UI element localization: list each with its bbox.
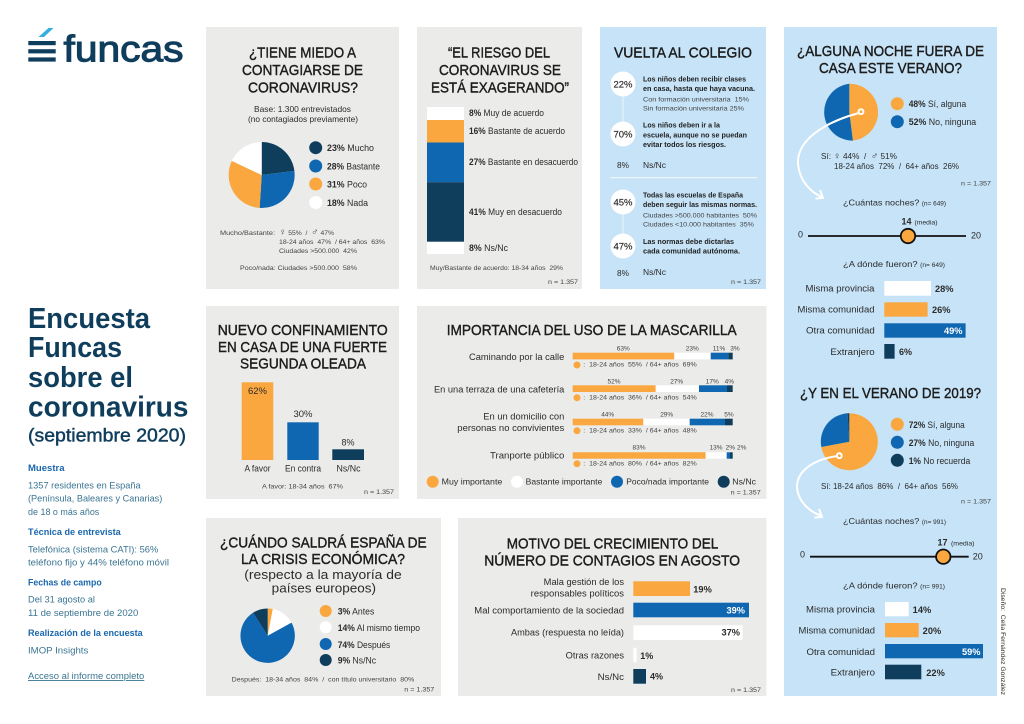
survey details: teléfono fijo y 44% teléfono móvil (28, 558, 169, 568)
percentage circles: 8% (617, 268, 629, 278)
survey details: Técnica de entrevista (28, 527, 122, 537)
heading: ¿TIENE MIEDO A (249, 44, 356, 62)
survey details: Muestra (28, 463, 66, 473)
statement block 2: Ciudades <10.000 habitantes 35% (643, 221, 754, 228)
breakdown: verano 2019: Sí: 18-24 años 86% / 64+ años 56% (821, 482, 958, 491)
heading: CONTAGIARSE DE (242, 62, 363, 79)
bar chart: destino 2019: Otra comunidad (806, 647, 875, 657)
pie chart: este verano (824, 84, 878, 141)
bar chart: Ambas (respuesta no leída) (511, 628, 624, 638)
pie chart (229, 142, 295, 208)
bar chart: destino 2019: 20% (923, 626, 941, 636)
statement block 1: Ns/Nc (643, 160, 667, 170)
main title (28, 303, 188, 446)
heading: MOTIVO DEL CRECIMIENTO DEL (507, 535, 718, 552)
statement block 1: Los niños deben ir a la (643, 121, 721, 130)
breakdown: este verano: 18-24 años 72% / 64+ años 26% (834, 162, 959, 171)
pie chart (240, 608, 295, 663)
sample size: n = 1.357 (731, 491, 761, 497)
breakdown: este verano: n = 1.357 (961, 182, 992, 188)
legend: 23% Mucho (327, 143, 374, 153)
statement block 2: cada comunidad autónoma. (643, 246, 740, 255)
heading: LA CRISIS ECONÓMICA? (241, 551, 405, 568)
heading: (respecto a la mayoría de (244, 567, 402, 582)
row: transporte público: 83% (632, 444, 646, 451)
percentage circles: 45% (614, 198, 633, 208)
row: domicilio: 22% (700, 412, 714, 419)
row: domicilio: personas no convivientes (457, 423, 565, 433)
survey details: Telefónica (sistema CATI): 56% (28, 544, 158, 554)
arrow: este verano (798, 109, 863, 198)
bar chart: responsables políticos (531, 589, 625, 599)
stacked bar (427, 107, 464, 254)
percentage circles: 47% (614, 242, 633, 252)
heading (242, 44, 363, 96)
pie chart: verano 2019 (821, 413, 878, 470)
legend: 31% Poco (327, 180, 367, 190)
sample size: n = 1.357 (404, 688, 435, 694)
percentage circles: 70% (614, 130, 633, 140)
heading: verano 2019: ¿Y EN EL VERANO DE 2019? (800, 385, 981, 402)
bar chart: Ns/Nc (598, 672, 625, 682)
statement block 1 (643, 75, 755, 170)
heading: EN CASA DE UNA FUERTE (218, 339, 387, 356)
breakdown: verano 2019: n = 1.357 (961, 499, 992, 505)
row: transporte público: : 18-24 años 80% / 64+ años 82% (583, 460, 697, 467)
heading: CORONAVIRUS SE (439, 62, 561, 79)
heading (484, 535, 740, 570)
statement block 1: Con formación universitaria 15% (643, 97, 749, 104)
survey details: Fechas de campo (28, 578, 102, 588)
legend: verano 2019: 1% No recuerda (909, 456, 970, 466)
row: terraza: 52% (607, 378, 621, 385)
bar chart: destino 2020: Misma provincia (806, 284, 874, 294)
bar chart: A favor (244, 464, 271, 474)
survey details: de 18 o más años (28, 507, 100, 517)
legend (320, 605, 420, 666)
bar chart: Mal comportamiento de la sociedad (474, 605, 624, 615)
legend: 3% Antes (338, 607, 375, 617)
bar chart: destino 2020: 49% (944, 326, 962, 336)
row: caminando por la calle: 23% (686, 346, 699, 353)
legend (427, 476, 757, 488)
row: caminando por la calle (469, 346, 740, 369)
bar chart: 62% (248, 386, 268, 397)
bar chart: 1% (640, 651, 653, 661)
statement block 1: Sin formación universitaria 25% (643, 105, 744, 112)
bar chart: 37% (722, 628, 740, 638)
bar chart: En contra (285, 464, 321, 474)
percentage circles: 22% (614, 80, 633, 90)
main title: Encuesta (28, 303, 151, 335)
row: terraza: 27% (670, 378, 683, 385)
row: transporte público (490, 444, 747, 467)
legend: 18% Nada (327, 198, 368, 208)
bar chart: Ns/Nc (336, 464, 361, 474)
main title: Funcas (28, 332, 122, 364)
bar chart: destino 2019 (798, 580, 983, 679)
statement block 1: escuela, aunque no se puedan (643, 130, 747, 140)
row: caminando por la calle: : 18-24 años 55% / 64+ años 69% (583, 362, 697, 369)
heading (431, 44, 569, 96)
bar chart (474, 577, 749, 684)
statement block 2: Ciudades >500.000 habitantes 50% (643, 213, 757, 220)
bar chart: destino 2019: 14% (913, 605, 931, 615)
bar chart: Mala gestión de los (544, 577, 625, 587)
bar chart (242, 382, 364, 474)
survey details: 1357 residentes en España (28, 480, 141, 490)
bar chart: Otras razones (566, 650, 625, 660)
slider: noches 2019: 0 (800, 550, 805, 560)
slider: noches 2020: 14 (902, 216, 912, 226)
arrow: verano 2019 (797, 453, 842, 518)
heading: ¿CUÁNDO SALDRÁ ESPAÑA DE (220, 534, 427, 551)
bar chart: destino 2019: Misma provincia (806, 605, 875, 615)
heading: CORONAVIRUS? (248, 80, 358, 96)
breakdown note (220, 227, 385, 272)
bar chart: 19% (693, 585, 712, 595)
breakdown note: Mucho/Bastante: (220, 230, 275, 237)
row: caminando por la calle: Caminando por la calle (469, 352, 564, 362)
row: transporte público: 2% (737, 444, 747, 451)
main title: sobre el (28, 362, 133, 394)
base note (248, 104, 358, 124)
note: Después: 18-34 años 84% / con título universitario 80% (232, 677, 415, 684)
legend: 28% Bastante (327, 162, 380, 172)
percentage circles (610, 72, 636, 278)
panel: salida de la crisis (206, 518, 441, 696)
slider: noches 2019: (media) (951, 542, 974, 548)
bar chart: destino 2020: ¿A dónde fueron? (n= 649) (843, 259, 945, 269)
main title: coronavirus (28, 392, 188, 424)
panel: vuelta al colegio (600, 27, 766, 289)
bar chart: destino 2020: 28% (935, 284, 954, 294)
bar chart: destino 2020: 6% (899, 347, 912, 357)
panel: motivo del crecimiento (458, 518, 766, 696)
panel: el riesgo se está exagerando (417, 27, 582, 289)
row: domicilio: En un domicilio con (483, 411, 564, 421)
survey details: 11 de septiembre de 2020 (28, 608, 138, 618)
bar labels: 8% Ns/Nc (469, 243, 508, 253)
bar labels (469, 108, 578, 253)
bar chart: 39% (726, 605, 745, 615)
legend: verano 2019: 27% No, ninguna (909, 438, 974, 448)
legend: Poco/nada importante (626, 476, 709, 486)
logo: funcas: funcas (64, 29, 184, 70)
heading: países europeos) (272, 580, 376, 595)
legend: este verano (891, 97, 976, 128)
survey details: (Península, Baleares y Canarias) (28, 494, 162, 504)
panel: nuevo confinamiento (206, 306, 399, 499)
statement block 2: Todas las escuelas de España (643, 191, 744, 200)
legend (309, 141, 380, 209)
logo: funcas (28, 28, 183, 70)
row: terraza: 17% (706, 378, 719, 385)
legend: este verano: 52% No, ninguna (909, 117, 976, 127)
sample size: n = 1.357 (731, 688, 762, 694)
heading: NÚMERO DE CONTAGIOS EN AGOSTO (484, 553, 740, 570)
note: A favor: 18-34 años 67% (262, 483, 343, 490)
sample size: n = 1.357 (731, 280, 762, 286)
statement block 2: Ns/Nc (643, 267, 667, 277)
breakdown note: Poco/nada: Ciudades >500.000 58% (240, 265, 357, 272)
bar chart: destino 2020: Misma comunidad (798, 305, 874, 315)
row: terraza: 4% (725, 378, 734, 385)
slider: noches 2020: (media) (914, 220, 938, 226)
bar chart: destino 2020: Extranjero (830, 347, 875, 357)
panel: noches fuera de casa (784, 27, 997, 696)
bar chart: destino 2019: 22% (926, 668, 945, 678)
heading: ESTÁ EXAGERANDO” (431, 80, 569, 96)
slider: noches 2020: 0 (798, 230, 803, 240)
panel: uso de la mascarilla (417, 306, 766, 499)
survey details: IMOP Insights (28, 645, 89, 655)
heading (220, 534, 427, 595)
design credit: Diseño: Celia Fernández González (999, 588, 1006, 696)
row: domicilio: : 18-24 años 33% / 64+ años 48% (583, 428, 697, 435)
legend: 74% Después (338, 640, 391, 650)
base note: (no contagiados previamente) (248, 114, 358, 124)
heading: este verano (797, 43, 984, 77)
heading: NUEVO CONFINAMIENTO (218, 322, 388, 339)
row: caminando por la calle: 3% (730, 346, 740, 353)
statement block 1: evitar todos los riesgos. (643, 140, 726, 149)
heading: este verano: ¿ALGUNA NOCHE FUERA DE (797, 43, 984, 60)
row: transporte público: Tranporte público (490, 450, 564, 460)
survey details: Del 31 agosto al (28, 595, 95, 605)
bar chart: 4% (650, 672, 663, 682)
panel: miedo a contagiarse (206, 27, 399, 289)
row: transporte público: 2% (726, 444, 735, 451)
slider: noches 2020 (798, 198, 981, 243)
bar chart: destino 2020 (798, 259, 966, 359)
breakdown: este verano (821, 151, 992, 188)
bar labels: 41% Muy en desacuerdo (469, 207, 562, 217)
breakdown: este verano: Sí: ♀ 44% / ♂ 51% (821, 151, 897, 162)
bar chart: destino 2020: 26% (932, 305, 950, 315)
slider: noches 2019: 17 (938, 538, 948, 548)
main title: (septiembre 2020) (28, 425, 186, 446)
slider: noches 2019: 20 (973, 552, 983, 562)
statement block 2: Las normas debe dictarlas (643, 237, 734, 246)
base note: Base: 1.300 entrevistados (254, 104, 351, 114)
bar labels: 27% Bastante en desacuerdo (469, 157, 578, 167)
bar chart: destino 2019: ¿A dónde fueron? (n= 991) (843, 580, 945, 590)
bar chart: destino 2019: 59% (962, 647, 980, 657)
heading: IMPORTANCIA DEL USO DE LA MASCARILLA (447, 322, 737, 339)
breakdown note: 18-24 años 47% / 64+ años 63% (279, 239, 385, 246)
legend: Ns/Nc (732, 476, 757, 486)
row: domicilio (457, 411, 734, 435)
bar labels: 16% Bastante de acuerdo (469, 126, 565, 136)
statement block 1: en casa, hasta que haya vacuna. (643, 84, 755, 93)
heading: VUELTA AL COLEGIO (614, 44, 752, 62)
slider: noches 2019: ¿Cuántas noches? (n= 991) (843, 516, 946, 526)
row: caminando por la calle: 11% (713, 346, 725, 353)
survey details: Realización de la encuesta (28, 628, 144, 638)
bar chart: 30% (294, 409, 313, 420)
heading: este verano: CASA ESTE VERANO? (819, 60, 962, 77)
percentage circles: 8% (617, 160, 629, 170)
slider: noches 2019 (800, 516, 983, 564)
row: terraza: : 18-24 años 36% / 64+ años 54% (583, 394, 697, 401)
breakdown: verano 2019 (821, 482, 992, 505)
note: Muy/Bastante de acuerdo: 18-34 años 29% (430, 265, 563, 272)
legend: Bastante importante (526, 476, 603, 486)
breakdown note: ♀ 55% / ♂ 47% (279, 227, 334, 238)
heading: SEGUNDA OLEADA (240, 356, 366, 372)
heading (218, 322, 388, 372)
survey details (28, 463, 169, 681)
legend: este verano: 48% Sí, alguna (909, 99, 966, 109)
statement block 1: Los niños deben recibir clases (643, 75, 746, 84)
legend: Muy importante (442, 476, 503, 486)
row: caminando por la calle: 63% (617, 346, 630, 353)
legend: verano 2019 (891, 418, 974, 467)
bar chart: 8% (342, 438, 355, 449)
row: domicilio: 5% (724, 412, 734, 419)
row: transporte público: 13% (709, 444, 723, 451)
statement block 2 (643, 191, 757, 277)
legend: verano 2019: 72% Sí, alguna (909, 420, 965, 430)
statement block 2: deben seguir las mismas normas. (643, 200, 757, 209)
slider: noches 2020: ¿Cuántas noches? (n= 649) (843, 198, 946, 208)
breakdown note: Ciudades >500.000 42% (279, 248, 357, 255)
bar chart: destino 2019: Extranjero (831, 668, 875, 678)
bar chart: destino 2020: Otra comunidad (806, 326, 875, 336)
heading: “EL RIESGO DEL (448, 44, 550, 62)
row: domicilio: 44% (601, 412, 614, 419)
row: domicilio: 29% (660, 412, 673, 419)
sample size: n = 1.357 (548, 280, 579, 286)
legend: 9% Ns/Nc (338, 656, 376, 666)
sample size: n = 1.357 (364, 490, 395, 496)
bar labels: 8% Muy de acuerdo (469, 108, 544, 118)
row: terraza (434, 378, 734, 401)
row: terraza: En una terraza de una cafetería (434, 384, 564, 394)
slider: noches 2020: 20 (971, 230, 981, 240)
survey details: Acceso al informe completo (28, 671, 144, 681)
legend: 14% Al mismo tiempo (338, 623, 420, 633)
bar chart: destino 2019: Misma comunidad (798, 626, 875, 636)
